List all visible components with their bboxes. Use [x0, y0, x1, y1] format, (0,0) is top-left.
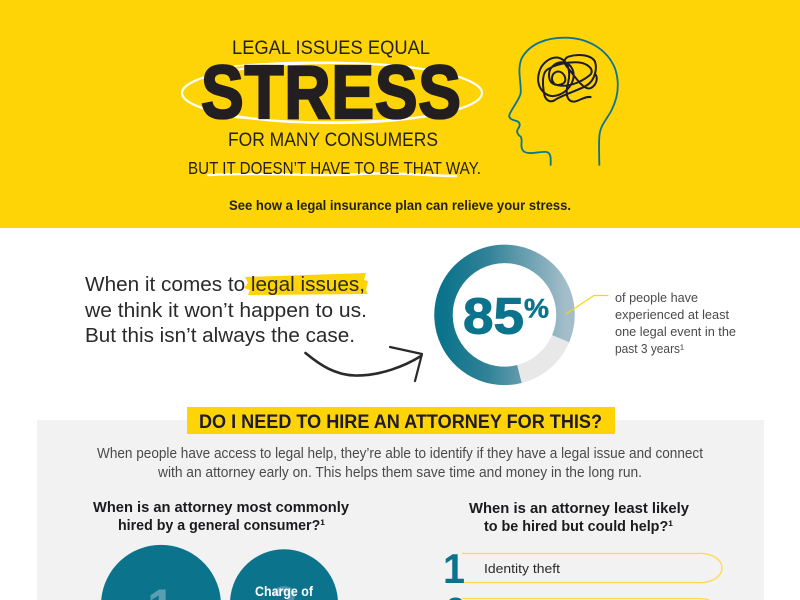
right column heading	[469, 500, 690, 535]
title: for many consumers: FOR MANY CONSUMERS	[228, 130, 438, 151]
callout text: experienced at least	[615, 308, 730, 322]
ring: 85 percent	[443, 254, 565, 376]
stat number: 85	[463, 288, 524, 344]
section intro text: with an attorney early on. This helps them save time and money in the long run.	[157, 465, 642, 481]
intro line: See how a legal insurance plan can relieve your stress.	[229, 198, 571, 213]
list item 1: 1	[443, 545, 465, 592]
panel: attorney section	[37, 407, 764, 600]
statement copy: When it comes to legal issues,	[85, 273, 365, 296]
section intro text: When people have access to legal help, they’re able to identify if they have a legal issue and connect	[97, 446, 703, 462]
list item 1	[443, 545, 722, 592]
donut chart: 85%	[443, 254, 565, 376]
section heading banner: DO I NEED TO HIRE AN ATTORNEY FOR THIS?	[199, 412, 602, 433]
ring: remainder	[520, 339, 561, 374]
callout text: one legal event in the	[615, 325, 736, 339]
list item 1: Identity theft	[484, 561, 560, 576]
title: stress: STRESS	[201, 50, 461, 134]
arrow	[306, 347, 422, 381]
subtitle: BUT IT DOESN’T HAVE TO BE THAT WAY.	[188, 158, 481, 178]
right column heading: to be hired but could help?¹	[484, 518, 673, 535]
circle: rank 1	[101, 545, 221, 600]
callout text: past 3 years¹	[615, 342, 684, 356]
title: legal issues equal: LEGAL ISSUES EQUAL	[232, 38, 430, 59]
section intro text	[97, 446, 703, 481]
right column heading: When is an attorney least likely	[469, 500, 690, 517]
circle: rank 2: Charge of	[255, 584, 313, 599]
callout text: of people have	[615, 291, 698, 305]
callout text	[615, 291, 736, 356]
header band	[0, 0, 800, 228]
left column heading: When is an attorney most commonly	[93, 499, 350, 516]
icon: tangled scribble	[538, 55, 597, 102]
left column heading: hired by a general consumer?¹	[118, 517, 325, 534]
panel: statement text: we think it won’t happen to us.	[84, 299, 367, 322]
callout leader line	[566, 296, 608, 314]
icon: head outline	[509, 38, 618, 166]
hand-drawn oval around stress	[182, 62, 482, 123]
left column heading	[93, 499, 350, 534]
circle: rank 2	[230, 549, 338, 600]
panel: statement text	[84, 273, 368, 347]
percent sign: %	[524, 294, 549, 324]
highlight brush	[244, 273, 368, 295]
subtitle underline stroke	[208, 173, 456, 176]
panel: statement text: But this isn’t always the case.	[85, 324, 355, 347]
